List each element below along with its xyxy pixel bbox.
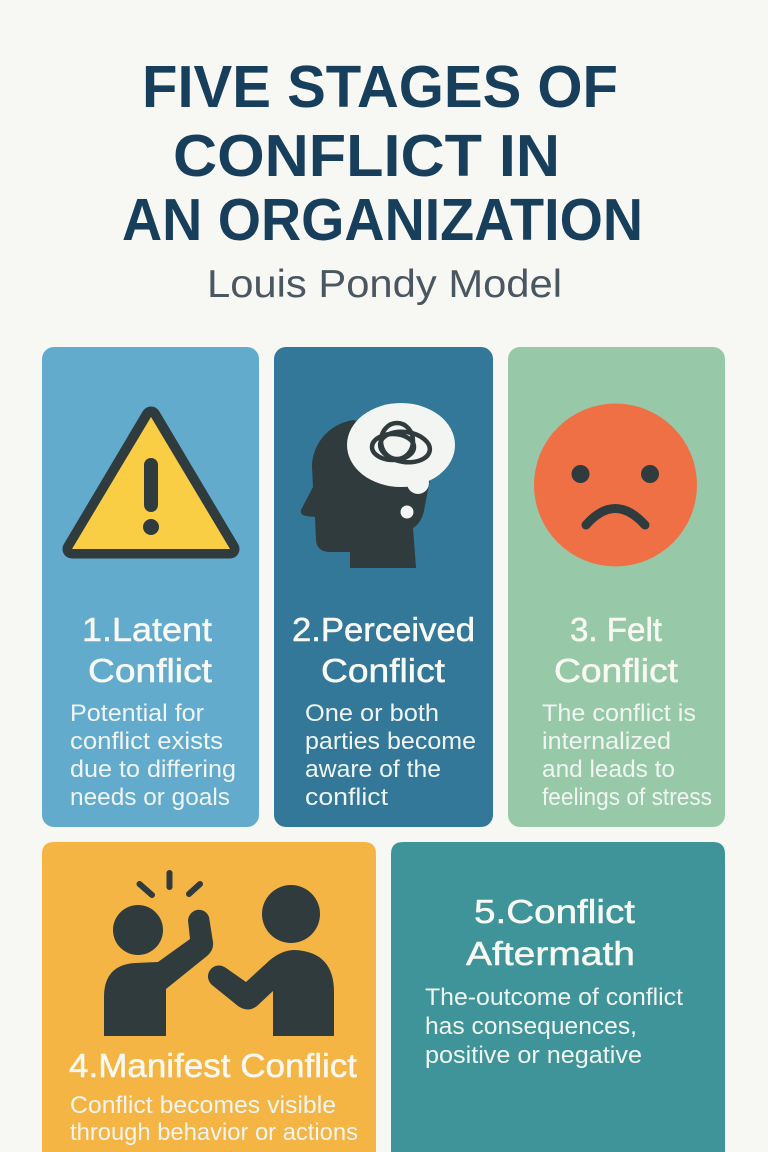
- text: latent conflict description: needs or goals: [70, 784, 230, 811]
- text: perceived conflict description: One or both: [305, 700, 439, 727]
- text: felt conflict description: feelings of stress: [542, 784, 712, 811]
- text: latent conflict description: conflict exists: [70, 728, 223, 755]
- heading: felt conflict: [554, 611, 678, 689]
- panel: latent conflict: [42, 347, 259, 827]
- text: perceived conflict description: aware of the: [305, 756, 441, 783]
- icon: sad face: [534, 404, 697, 566]
- heading: perceived conflict: 2.Perceived: [292, 611, 475, 648]
- heading: felt conflict: 3. Felt: [570, 611, 662, 648]
- title: [122, 54, 643, 253]
- text: perceived conflict description: conflict: [305, 784, 388, 811]
- panel: manifest conflict: [42, 842, 376, 1152]
- title: AN ORGANIZATION: [122, 187, 643, 253]
- text: perceived conflict description: parties become: [305, 728, 476, 755]
- subtitle: Louis Pondy Model: [207, 263, 562, 306]
- icon: warning triangle: [72, 416, 230, 549]
- text: felt conflict description: The conflict is: [542, 700, 696, 727]
- heading: conflict aftermath: Aftermath: [466, 935, 635, 972]
- text: manifest conflict description: through behavior or actions: [70, 1119, 358, 1146]
- text: felt conflict description: [542, 700, 712, 811]
- panel: felt conflict: [508, 347, 725, 827]
- text: conflict aftermath description: The-outcome of conflict: [425, 984, 683, 1011]
- heading: latent conflict: [82, 611, 212, 689]
- panel: perceived conflict: [274, 347, 493, 827]
- heading: felt conflict: Conflict: [554, 652, 678, 689]
- heading: latent conflict: Conflict: [88, 652, 212, 689]
- text: latent conflict description: Potential for: [70, 700, 204, 727]
- heading: latent conflict: 1.Latent: [82, 611, 212, 648]
- text: latent conflict description: due to differing: [70, 756, 236, 783]
- heading: perceived conflict: Conflict: [321, 652, 445, 689]
- text: manifest conflict description: Conflict becomes visible: [70, 1092, 336, 1119]
- title: CONFLICT IN: [173, 123, 560, 189]
- icon: head with tangled thought: [301, 403, 455, 568]
- icon: two people in confrontation: [104, 873, 334, 1036]
- text: felt conflict description: and leads to: [542, 756, 675, 783]
- text: conflict aftermath description: has consequences,: [425, 1013, 637, 1040]
- heading: manifest conflict: 4.Manifest Conflict: [69, 1047, 357, 1084]
- text: felt conflict description: internalized: [542, 728, 671, 755]
- text: perceived conflict description: [305, 700, 476, 811]
- heading: conflict aftermath: [466, 893, 635, 972]
- text: conflict aftermath description: positive or negative: [425, 1042, 642, 1069]
- heading: conflict aftermath: 5.Conflict: [474, 893, 635, 930]
- panel: conflict aftermath: [391, 842, 725, 1152]
- title: FIVE STAGES OF: [142, 54, 618, 120]
- heading: perceived conflict: [292, 611, 475, 689]
- text: conflict aftermath description: [425, 984, 683, 1069]
- text: manifest conflict description: [70, 1092, 358, 1146]
- text: latent conflict description: [70, 700, 236, 811]
